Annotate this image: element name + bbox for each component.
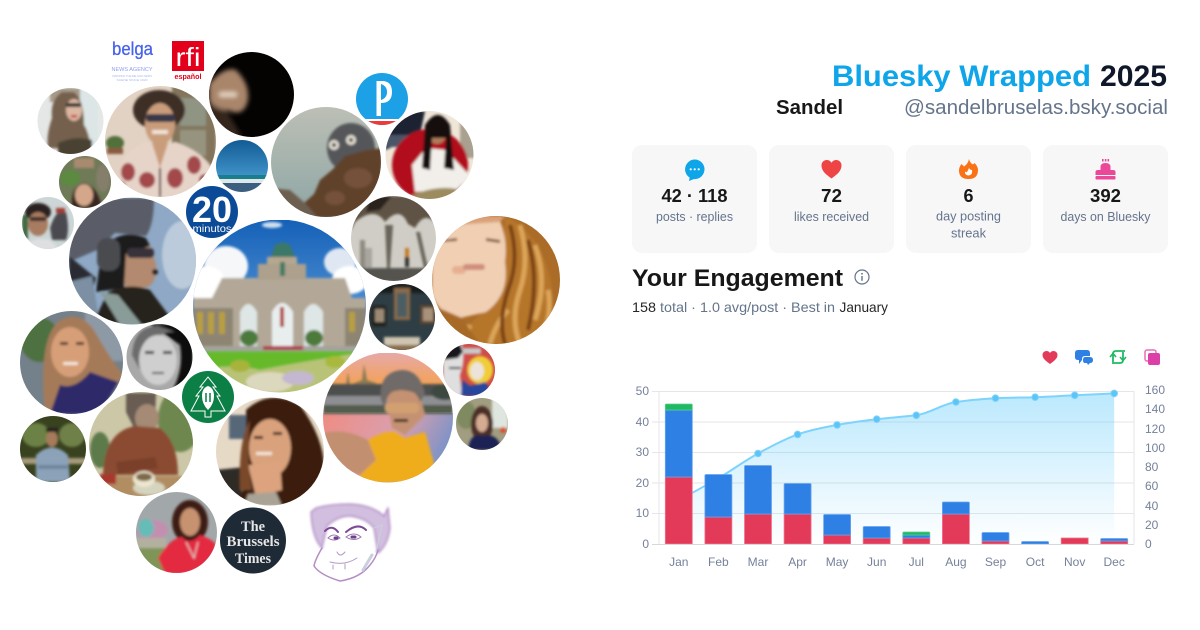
panel: avatar bubble cluster xyxy=(20,39,560,581)
month labels: Nov xyxy=(1064,555,1085,569)
avatar: woman with wavy golden hair xyxy=(432,216,560,344)
green reposts bars xyxy=(665,404,930,535)
right axis labels: 80 xyxy=(1145,460,1159,474)
avatar: man in brown sweater with coffee xyxy=(89,392,193,496)
avatar: black and white portrait xyxy=(126,324,193,391)
title: 2025 xyxy=(1100,60,1167,93)
avatar: Cinquantenaire arch photo xyxy=(186,220,368,396)
cumulative points xyxy=(755,390,1117,457)
avatar: vampire sketch xyxy=(311,504,390,581)
chart legend xyxy=(1042,350,1160,365)
month labels xyxy=(669,555,1125,569)
stat card: day posting streak: day posting xyxy=(936,208,1001,224)
right axis labels: 0 xyxy=(1145,537,1152,551)
avatar: P logo xyxy=(356,73,408,126)
avatar: man with chicken xyxy=(22,197,74,250)
month labels: Dec xyxy=(1104,555,1125,569)
engagement summary: 158 xyxy=(632,299,656,315)
right axis labels: 140 xyxy=(1145,402,1165,416)
icon: flame xyxy=(959,159,978,179)
avatar: 20 minutos logo: 20 xyxy=(192,189,232,230)
avatar: woman in garden xyxy=(456,398,508,450)
stat card: likes received: 72 xyxy=(821,186,842,206)
cumulative line xyxy=(679,393,1114,500)
month labels: Apr xyxy=(788,555,807,569)
stat card: day posting streak: 6 xyxy=(964,186,974,206)
icon: speech bubble xyxy=(685,160,704,181)
cumulative area xyxy=(679,393,1114,544)
avatar: Moorish arcade interior xyxy=(351,196,436,282)
engagement summary: total · 1.0 avg/post · Best in xyxy=(660,299,835,315)
title: Bluesky Wrapped xyxy=(832,60,1091,93)
icon: quotes xyxy=(1145,350,1160,365)
logo: belga news agency xyxy=(112,39,154,82)
right axis labels: 20 xyxy=(1145,518,1159,532)
avatar: 20 minutos logo xyxy=(186,186,238,238)
month labels: Mar xyxy=(748,555,768,569)
right axis labels: 160 xyxy=(1145,383,1165,397)
axis baseline xyxy=(652,544,1134,546)
heading: your engagement: Your Engagement xyxy=(632,265,843,292)
stat card: posts and replies xyxy=(632,145,757,253)
avatar: green tree logo xyxy=(182,371,234,423)
stat card: days on Bluesky: 392 xyxy=(1090,186,1121,206)
avatar: woman on red chair xyxy=(385,111,476,205)
icon: info xyxy=(855,270,869,284)
right axis labels: 100 xyxy=(1145,441,1165,455)
right axis labels: 120 xyxy=(1145,422,1165,436)
left axis labels: 0 xyxy=(642,537,649,551)
month labels: Jul xyxy=(909,555,924,569)
logo: belga news agency: belga xyxy=(112,39,154,59)
month labels: Feb xyxy=(708,555,729,569)
avatar: smiling woman on dark background xyxy=(209,52,294,137)
month labels: May xyxy=(826,555,848,569)
logo: belga news agency: NEWS AGENCY xyxy=(112,67,153,73)
logo: belga news agency: INSPIRING THE BELGIAN NEWS xyxy=(112,74,152,78)
left axis labels: 50 xyxy=(636,384,649,398)
icon: reposts xyxy=(1110,351,1126,363)
stat card: likes received: likes received xyxy=(794,209,869,224)
left axis labels: 10 xyxy=(636,506,649,520)
month labels: Oct xyxy=(1026,555,1045,569)
engagement summary: January xyxy=(840,299,888,315)
month labels: Sep xyxy=(985,555,1006,569)
avatar: woman in red top xyxy=(136,492,217,574)
stat card: posts and replies: 42 · 118 xyxy=(662,186,728,206)
icon: cake xyxy=(1096,159,1116,180)
logo: rfi espanol xyxy=(172,41,204,81)
stat card: day posting streak: streak xyxy=(951,226,986,240)
month labels: Jan xyxy=(669,555,688,569)
avatar: curly haired woman xyxy=(105,86,216,200)
left axis labels: 40 xyxy=(636,415,649,429)
stat card: day posting streak xyxy=(906,145,1031,253)
handle: @sandelbruselas.bsky.social xyxy=(904,97,1168,119)
right axis labels: 60 xyxy=(1145,479,1159,493)
avatar: cookie figure on rock xyxy=(271,107,382,218)
stat card: days on Bluesky: days on Bluesky xyxy=(1060,209,1151,224)
avatar: pilot with headset xyxy=(69,198,202,325)
display name: Sandel xyxy=(776,97,843,119)
avatar: The Brussels Times logo: Times xyxy=(235,551,271,567)
stat card: days on Bluesky xyxy=(1043,145,1168,253)
grid lines xyxy=(652,391,1134,544)
avatar: man in blue shirt xyxy=(20,416,86,483)
left axis labels: 20 xyxy=(636,476,649,490)
stat card: posts and replies: posts · replies xyxy=(656,209,733,224)
left axis labels: 30 xyxy=(636,445,649,459)
avatar: man in yellow shirt at sunset xyxy=(323,353,459,483)
icon: heart xyxy=(822,160,842,178)
avatar: 20 minutos logo: minutos xyxy=(192,224,232,235)
chart: monthly engagement bars with cumulative line xyxy=(636,383,1165,569)
avatar: woman at mountain monastery xyxy=(59,156,111,208)
icon: likes xyxy=(1042,351,1058,364)
logo: rfi espanol: español xyxy=(174,74,202,81)
avatar: smiling woman with scarf xyxy=(20,311,123,414)
right axis labels: 40 xyxy=(1145,499,1159,513)
avatar: museum interior xyxy=(369,284,435,351)
avatar: The Brussels Times logo: Brussels xyxy=(226,534,280,550)
stat card: likes received xyxy=(769,145,894,253)
month labels: Jun xyxy=(867,555,886,569)
engagement summary xyxy=(632,299,888,315)
avatar: The Brussels Times logo: The xyxy=(241,519,265,535)
logo: belga news agency: SCENE SINCE 1920 xyxy=(116,78,148,82)
icon: replies xyxy=(1075,350,1093,365)
avatar: The Brussels Times logo xyxy=(220,508,286,574)
left axis labels xyxy=(636,384,649,551)
avatar: pop art comic xyxy=(443,344,495,396)
month labels: Aug xyxy=(945,555,967,569)
blue replies bars xyxy=(665,410,1128,544)
avatar: sea horizon xyxy=(216,140,268,193)
logo: rfi espanol: rfi xyxy=(176,42,200,72)
right axis labels xyxy=(1145,383,1165,551)
avatar: woman resting chin on hand xyxy=(216,398,324,506)
red likes bars xyxy=(665,477,1128,544)
avatar: woman with glasses xyxy=(37,88,104,156)
